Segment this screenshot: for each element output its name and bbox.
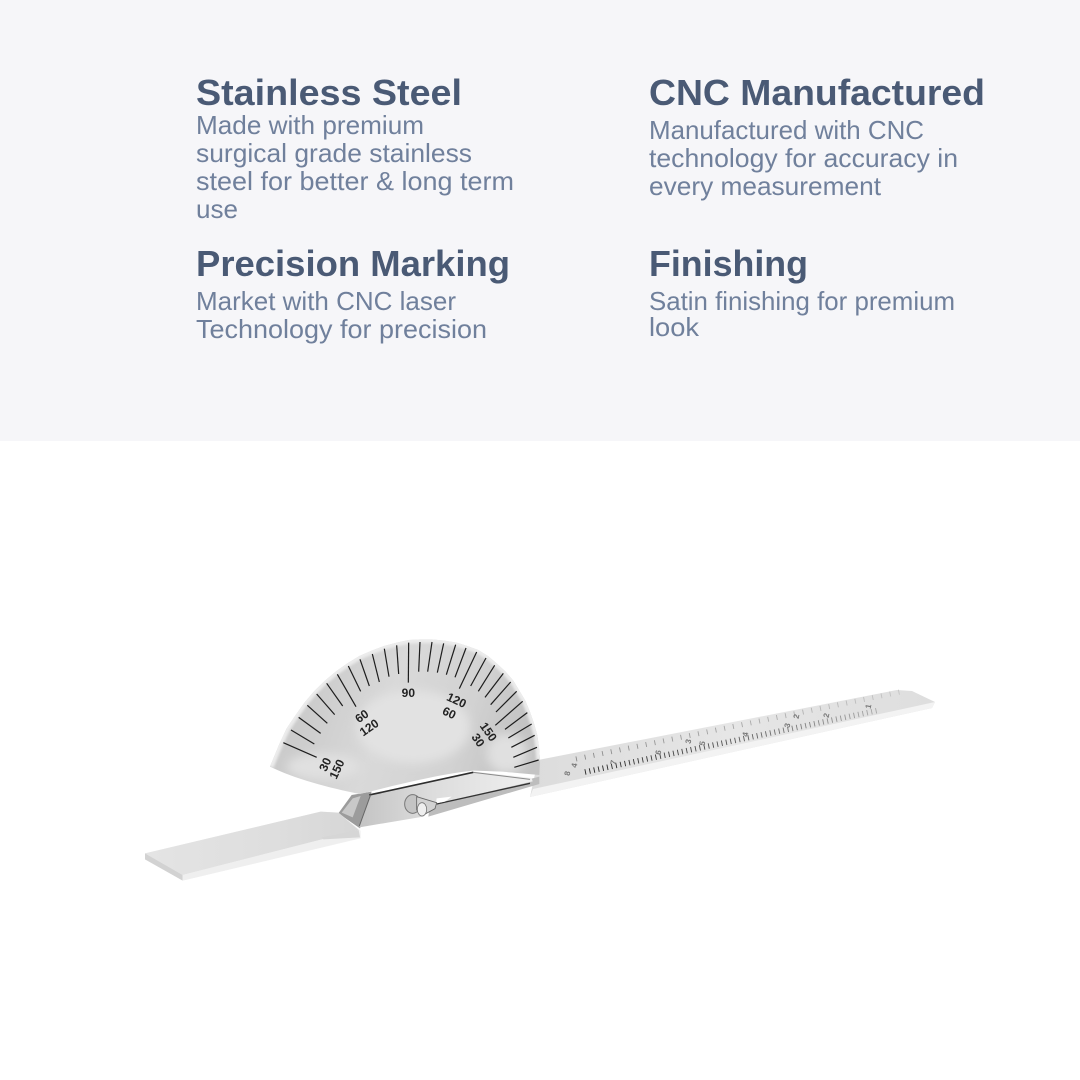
- feature: Precision Marking: Market with CNC laser: [196, 286, 456, 316]
- angle numbers: 60: [440, 704, 458, 722]
- feature: CNC Manufactured: technology for accuracy in: [649, 143, 958, 173]
- ruler arm: [530, 690, 935, 797]
- ruler numbers: 3: [684, 738, 694, 745]
- feature: Finishing: Satin finishing for premium: [649, 286, 955, 316]
- feature: Stainless Steel: [196, 72, 514, 224]
- angle numbers: [316, 686, 500, 781]
- feature: CNC Manufactured: Manufactured with CNC: [649, 115, 924, 145]
- angle numbers: 90: [402, 686, 415, 700]
- ruler numbers: 1: [864, 703, 874, 710]
- feature: Stainless Steel: Stainless Steel: [196, 72, 462, 113]
- handle arm: [145, 812, 361, 881]
- protractor fan: [270, 639, 540, 794]
- angle tick marks: [283, 642, 539, 767]
- ruler numbers: 6: [654, 749, 664, 756]
- feature: CNC Manufactured: CNC Manufactured: [649, 72, 985, 113]
- angle numbers: 60: [352, 707, 372, 726]
- ruler numbers: 2: [792, 713, 802, 720]
- ruler numbers: 7: [609, 759, 619, 766]
- feature: Stainless Steel: use: [196, 194, 238, 224]
- angle numbers: 30: [468, 731, 488, 750]
- neck hinge: [338, 792, 372, 828]
- angle numbers: 120: [445, 690, 469, 711]
- feature: Finishing: look: [649, 312, 700, 342]
- feature: Finishing: [649, 243, 955, 342]
- panel: features background: [0, 0, 1080, 441]
- hinge pin: [405, 795, 437, 816]
- feature: Precision Marking: [196, 243, 510, 344]
- angle numbers: 150: [326, 757, 348, 781]
- hinge clip plate: [359, 772, 539, 827]
- feature: Stainless Steel: surgical grade stainless: [196, 138, 472, 168]
- feature: Finishing: Finishing: [649, 243, 808, 284]
- ruler numbers: 8: [563, 770, 573, 777]
- feature: Precision Marking: Precision Marking: [196, 243, 510, 284]
- feature: CNC Manufactured: [649, 72, 985, 201]
- feature: Precision Marking: Technology for precision: [196, 314, 487, 344]
- ruler numbers: 3: [783, 722, 793, 729]
- angle numbers: 150: [477, 720, 500, 744]
- angle numbers: 30: [316, 755, 335, 773]
- feature: Stainless Steel: Made with premium: [196, 110, 424, 140]
- ruler numbers: 5: [698, 740, 708, 747]
- ruler numbers: 2: [822, 712, 832, 719]
- ruler numbers: [563, 703, 874, 777]
- ruler numbers: 4: [570, 762, 580, 769]
- feature: Stainless Steel: steel for better & long term: [196, 166, 514, 196]
- feature: CNC Manufactured: every measurement: [649, 171, 882, 201]
- ruler lower tick scale: [585, 710, 880, 772]
- product image: stainless steel finger goniometer: [145, 639, 935, 881]
- angle numbers: 120: [357, 716, 382, 739]
- ruler upper tick scale: [576, 692, 900, 759]
- ruler numbers: 4: [741, 731, 751, 738]
